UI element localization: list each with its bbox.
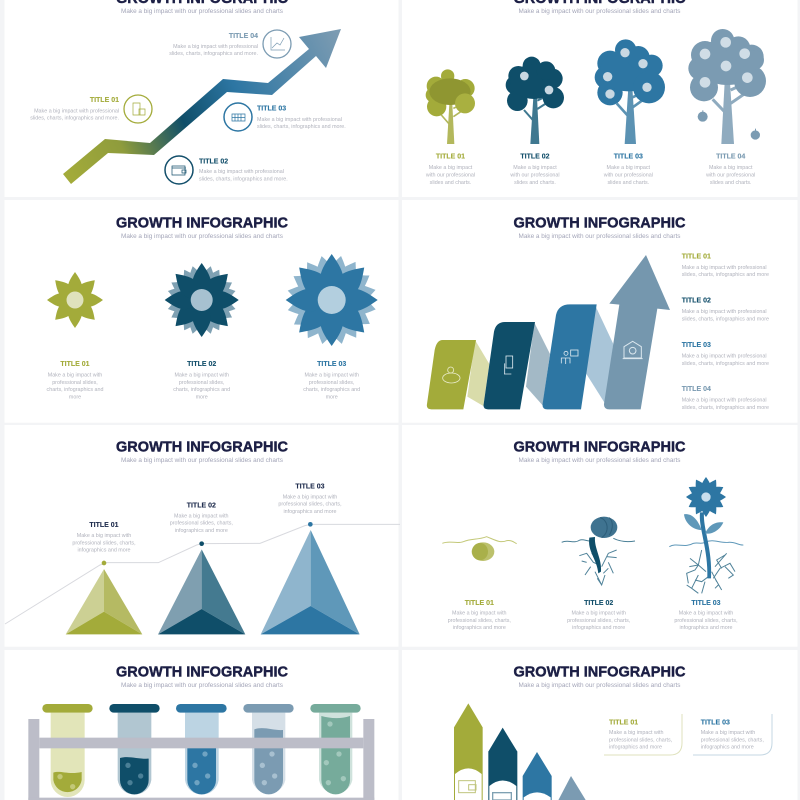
heading: GROWTH INFOGRAPHIC (514, 214, 686, 232)
sprout illustration (562, 517, 635, 585)
text: tree title 04: Make a big impact (709, 165, 753, 171)
text: pyramid title 03: TITLE 03 (295, 484, 325, 490)
text: tree title 03: Make a big impact (607, 165, 651, 171)
flower 2 (165, 263, 239, 337)
panel: rising arrow (4, 0, 398, 197)
text: seed title 01: infographics and more (453, 625, 506, 631)
text: flower title 03: Make a big impact with (679, 610, 733, 616)
text: pyramid title 01: TITLE 01 (89, 522, 119, 529)
text: pyramid title 03: infographics and more (283, 509, 337, 515)
text: ribbon title 01: Make a big impact with professional (682, 265, 767, 271)
text: pyramid title 02: Make a big impact with (174, 513, 229, 519)
text: flower title 03 (303, 361, 360, 400)
icon: hand with phone (504, 356, 513, 374)
text: pyramid title 03 (278, 484, 342, 515)
text: tree title 01 (425, 154, 475, 186)
text: tree title 04 (705, 154, 755, 186)
text: sprout title 02: TITLE 02 (584, 600, 613, 607)
text: ribbon title 04 (682, 386, 769, 411)
heading: GROWTH INFOGRAPHIC (514, 664, 686, 681)
heading: GROWTH INFOGRAPHIC (514, 439, 686, 456)
text: tree title 03: slides and charts. (607, 180, 649, 186)
text: title 03: TITLE 03 (257, 106, 286, 112)
text: flower title 02: charts, infographics and (173, 387, 230, 393)
text: ribbon title 03: slides, charts, infographics and more (682, 361, 769, 367)
text: tree title 02 (509, 154, 560, 186)
text: title 03 (257, 106, 346, 130)
pyramid 2 (158, 549, 245, 634)
subheading: Make a big impact with our professional slides and charts (519, 682, 680, 689)
heading: GROWTH INFOGRAPHIC (116, 439, 288, 456)
callout: title 01 (604, 714, 682, 755)
text: seed title 01: Make a big impact with (452, 610, 507, 616)
text: ribbon title 04: Make a big impact with professional (682, 398, 767, 404)
text: ribbon title 02: TITLE 02 (682, 298, 711, 304)
text: tree title 01: Make a big impact (429, 165, 473, 171)
text: ribbon title 04: slides, charts, infographics and more (682, 405, 769, 411)
text: pyramid title 01: professional slides, charts, (72, 540, 136, 546)
text: flower title 01 (47, 361, 103, 400)
text: title 02: TITLE 02 (199, 158, 228, 166)
callout: title 03: professional slides, charts, (701, 737, 764, 743)
icon: person and chart (561, 350, 578, 364)
text: flower title 02: Make a big impact with (174, 372, 229, 378)
heading: GROWTH INFOGRAPHIC (116, 664, 288, 681)
test tube rack graphic (28, 704, 374, 800)
tree 4 (688, 29, 766, 144)
subheading: Make a big impact with our professional slides and charts (519, 8, 680, 15)
text: flower title 03: TITLE 03 (317, 361, 346, 368)
text: pyramid title 01: infographics and more (77, 548, 131, 554)
text: flower title 03 (674, 600, 738, 631)
text: tree title 02: Make a big impact (513, 165, 557, 171)
tube 1 (42, 704, 93, 797)
callout: title 01: professional slides, charts, (609, 737, 672, 743)
icon: piggy bank (443, 367, 460, 383)
subheading: Make a big impact with our professional slides and charts (519, 233, 680, 240)
panel: pyramids (4, 425, 400, 647)
arrow column 4 (557, 776, 586, 800)
text: pyramid title 01 (72, 522, 136, 554)
text: pyramid title 02: professional slides, charts, (170, 521, 233, 527)
text: flower title 01: professional slides, (52, 380, 98, 386)
subheading: Make a big impact with our professional slides and charts (121, 457, 283, 464)
icon: chart (263, 30, 291, 58)
text: title 04: slides, charts, infographics and more. (169, 51, 258, 57)
panel: test tubes (4, 650, 398, 800)
text: pyramid title 01: Make a big impact with (77, 533, 131, 539)
text: flower title 03: more (326, 394, 338, 400)
text: title 03: slides, charts, infographics and more. (257, 124, 346, 130)
text: title 01: Make a big impact with professional (34, 108, 119, 114)
tube 2 (109, 704, 160, 795)
text: tree title 02: with our professional (509, 172, 560, 178)
text: flower title 01: charts, infographics and (47, 387, 103, 393)
panel: seed to flower (402, 425, 798, 647)
text: title 02 (199, 158, 288, 182)
callout: title 03: TITLE 03 (701, 720, 730, 726)
callout: title 01: Make a big impact with (609, 730, 664, 736)
flower 3 (285, 254, 378, 346)
text: sprout title 02: professional slides, charts, (567, 618, 630, 624)
text: flower title 01: TITLE 01 (60, 361, 90, 368)
text: title 01 (30, 97, 119, 122)
callout: title 03: infographics and more (701, 744, 754, 750)
tree 2 (506, 57, 564, 144)
text: ribbon title 03 (682, 342, 769, 367)
text: title 04 (169, 33, 258, 57)
tube 3 (176, 704, 227, 795)
text: tree title 02: slides and charts. (514, 180, 556, 186)
text: flower title 03: charts, infographics and (303, 387, 360, 393)
icon: coins (124, 95, 152, 123)
callout: title 03: Make a big impact with (701, 730, 755, 736)
arrow: growth line (63, 29, 341, 184)
text: seed title 01: TITLE 01 (465, 600, 494, 607)
panel: flowers (4, 200, 398, 423)
text: flower title 02: TITLE 02 (187, 361, 216, 368)
flower with roots illustration (669, 477, 743, 593)
panel: trees (402, 0, 798, 197)
text: ribbon title 03: Make a big impact with professional (682, 354, 767, 360)
text: sprout title 02 (567, 600, 630, 631)
text: tree title 01: TITLE 01 (436, 154, 465, 160)
subheading: Make a big impact with our professional slides and charts (121, 233, 283, 240)
rack (28, 719, 374, 800)
tube 5 (310, 704, 361, 794)
text: pyramid title 03: Make a big impact with (283, 494, 337, 500)
text: title 04: TITLE 04 (229, 33, 258, 40)
tree 1 (426, 69, 475, 144)
text: flower title 03: infographics and more (679, 625, 733, 631)
text: flower title 02: professional slides, (179, 380, 224, 386)
text: ribbon title 04: TITLE 04 (682, 386, 711, 393)
text: tree title 04: TITLE 04 (716, 154, 745, 160)
panel: arrow columns (402, 650, 798, 800)
text: title 02: Make a big impact with professional (199, 169, 284, 175)
connector line and dots (5, 522, 400, 624)
text: pyramid title 02 (170, 502, 233, 534)
text: ribbon title 01: slides, charts, infographics and more (682, 272, 769, 278)
text: ribbon title 02: Make a big impact with professional (682, 309, 767, 315)
text: title 02: slides, charts, infographics and more. (199, 176, 288, 182)
text: sprout title 02: Make a big impact with (571, 610, 626, 616)
text: title 04: Make a big impact with professional (173, 44, 258, 50)
ribbon graphic (427, 255, 670, 409)
text: flower title 03: TITLE 03 (691, 600, 721, 607)
text: flower title 02: more (196, 394, 208, 400)
icon: wallet (165, 156, 193, 184)
pyramid 3 (261, 530, 360, 634)
text: tree title 03 (603, 154, 653, 186)
tree 3 (595, 39, 665, 144)
text: tree title 02: TITLE 02 (520, 154, 550, 160)
text: ribbon title 02 (682, 298, 769, 322)
text: flower title 02 (173, 361, 230, 400)
arrow column 3 (523, 752, 552, 800)
text: flower title 03: professional slides, charts, (674, 618, 738, 624)
flower 1 (47, 272, 103, 328)
text: title 01: slides, charts, infographics and more. (30, 116, 119, 122)
text: tree title 03: with our professional (603, 172, 653, 178)
arrow column 1 (454, 703, 483, 800)
callout: title 03 (693, 714, 772, 755)
icon: calculator (224, 103, 252, 131)
text: flower title 03: professional slides, (309, 380, 354, 386)
text: title 03: Make a big impact with professional (257, 117, 342, 123)
seed illustration (442, 537, 517, 561)
text: tree title 01: slides and charts. (430, 180, 471, 186)
text: pyramid title 02: infographics and more (175, 528, 228, 534)
callout: title 01: TITLE 01 (609, 720, 638, 726)
text: ribbon title 02: slides, charts, infographics and more (682, 316, 769, 322)
callout: title 01: infographics and more (609, 744, 662, 750)
text: seed title 01: professional slides, charts, (448, 618, 511, 624)
text: ribbon title 01: TITLE 01 (682, 253, 711, 260)
icon: bank (623, 341, 643, 359)
text: ribbon title 01 (682, 253, 769, 278)
text: sprout title 02: infographics and more (572, 625, 625, 631)
tube 4 (243, 704, 294, 794)
text: pyramid title 02: TITLE 02 (187, 502, 216, 510)
text: seed title 01 (448, 600, 511, 631)
arrow column 2 (488, 728, 517, 800)
text: flower title 01: Make a big impact with (48, 372, 102, 378)
text: ribbon title 03: TITLE 03 (682, 342, 711, 349)
text: pyramid title 03: professional slides, charts, (278, 502, 342, 508)
text: flower title 01: more (69, 394, 81, 400)
text: flower title 03: Make a big impact with (304, 372, 359, 378)
panel: ribbon arrow (402, 200, 798, 423)
heading: GROWTH INFOGRAPHIC (116, 214, 288, 232)
pyramid 1 (66, 569, 142, 634)
column arrows graphic (454, 703, 586, 800)
text: title 01: TITLE 01 (90, 97, 119, 104)
subheading: Make a big impact with our professional slides and charts (121, 682, 283, 689)
subheading: Make a big impact with our professional slides and charts (519, 457, 680, 464)
subheading: Make a big impact with our professional slides and charts (121, 8, 283, 15)
text: tree title 04: with our professional (705, 172, 755, 178)
text: tree title 03: TITLE 03 (614, 154, 643, 160)
text: tree title 01: with our professional (425, 172, 475, 178)
text: tree title 04: slides and charts. (710, 180, 752, 186)
